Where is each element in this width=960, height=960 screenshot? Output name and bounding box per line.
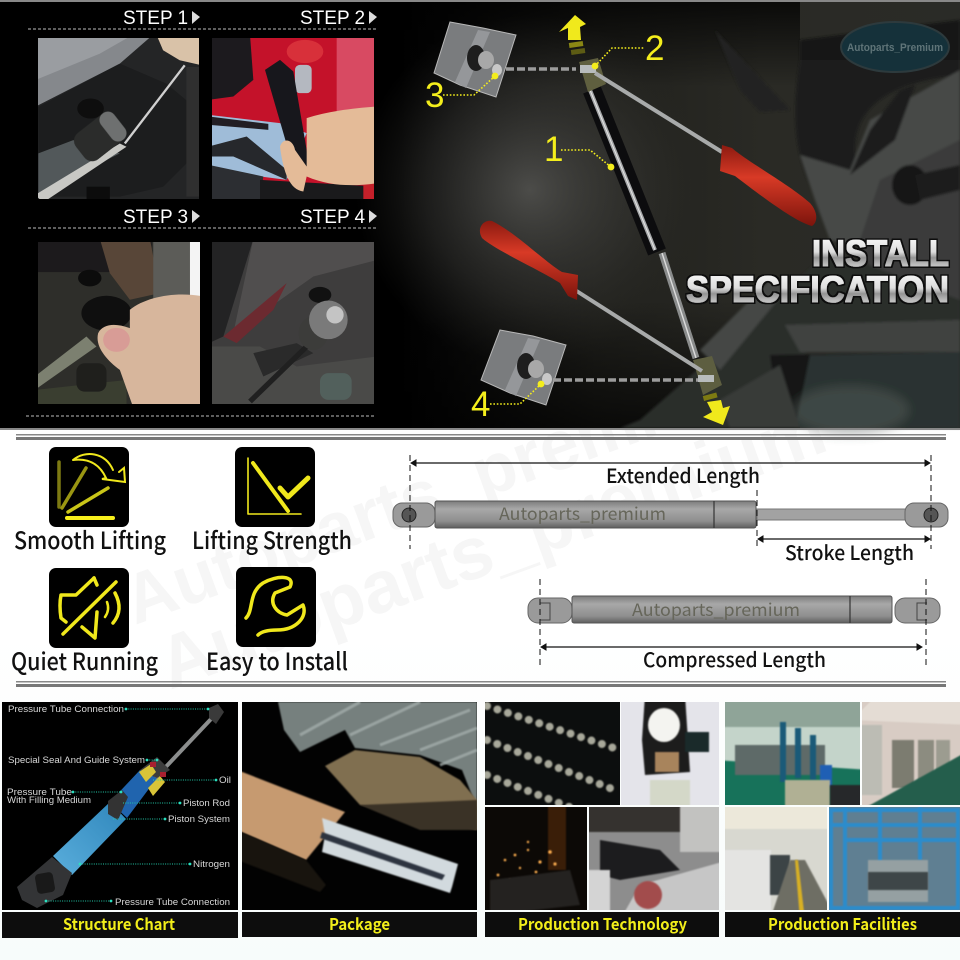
screwdriver upper bbox=[595, 73, 816, 226]
gas strut bbox=[579, 58, 722, 395]
callout 3 bbox=[425, 73, 498, 115]
tile: blue frames bbox=[829, 807, 960, 910]
tile: valve rows bbox=[485, 702, 620, 805]
feature: quiet running: Quiet Running bbox=[11, 642, 158, 677]
feature: quiet running bbox=[11, 568, 158, 677]
dimension: compressed length bbox=[540, 579, 926, 673]
tile: workshop floor bbox=[725, 702, 860, 805]
mount bracket lower bbox=[481, 330, 566, 405]
feature: easy to install: Easy to Install bbox=[206, 642, 348, 677]
caption: production facilities bbox=[725, 911, 960, 937]
caption: structure chart: Structure Chart bbox=[63, 911, 175, 935]
callouts: Oil bbox=[219, 775, 231, 786]
photo: production facilities bbox=[715, 692, 960, 920]
diagram: compressed strut: Autoparts_premium bbox=[632, 596, 800, 621]
tile: robot machine bbox=[589, 807, 719, 910]
feature: lifting strength: Lifting Strength bbox=[192, 521, 352, 556]
icon: lifting arc bbox=[59, 454, 125, 518]
dimension: stroke length bbox=[757, 490, 930, 566]
screwdriver lower bbox=[480, 221, 702, 371]
strut cross-section bbox=[17, 704, 224, 908]
tile: profile projector bbox=[621, 702, 719, 805]
logo badge: Autoparts_Premium bbox=[847, 42, 943, 54]
caption: package bbox=[242, 911, 477, 937]
diagram: extended strut: Autoparts_premium bbox=[499, 500, 666, 525]
dimension: extended length bbox=[410, 455, 931, 549]
diagram: compressed strut bbox=[528, 596, 940, 623]
panel: install hero bbox=[0, 0, 960, 435]
caption: structure chart bbox=[2, 911, 238, 938]
callouts: Piston Rod bbox=[183, 798, 230, 809]
divider bbox=[16, 434, 946, 687]
callout 2: 2 bbox=[645, 29, 664, 68]
step headings bbox=[123, 8, 377, 228]
icon: strut with check bbox=[248, 458, 308, 514]
step headings: STEP 2 bbox=[300, 8, 365, 29]
photo: step 3 bbox=[38, 242, 200, 404]
dimension: compressed length: Compressed Length bbox=[643, 644, 826, 673]
callout 1: 1 bbox=[544, 130, 563, 169]
callouts: With Filling Medium bbox=[7, 795, 91, 806]
callouts: Pressure Tube Connection bbox=[8, 704, 124, 715]
heading: install specification bbox=[686, 233, 949, 310]
logo badge bbox=[841, 22, 949, 72]
caption: production technology: Production Technology bbox=[518, 911, 687, 935]
photo: production technology bbox=[475, 692, 729, 920]
callout 4: 4 bbox=[471, 385, 490, 424]
callouts: Special Seal And Guide System bbox=[8, 755, 145, 766]
step headings: STEP 1 bbox=[123, 8, 188, 29]
step headings: STEP 4 bbox=[300, 207, 366, 228]
arrow: up bbox=[559, 15, 586, 55]
arrow: down bbox=[703, 393, 730, 425]
dashed connector lines bbox=[506, 69, 698, 380]
watermark: Autoparts_premium bbox=[113, 338, 765, 639]
callout 2 bbox=[592, 29, 664, 69]
step headings: STEP 3 bbox=[123, 207, 188, 228]
panel: structure chart bbox=[2, 702, 238, 910]
feature: lifting strength bbox=[192, 447, 352, 556]
callouts: Pressure Tube Connection bbox=[115, 897, 230, 908]
tile: corridor bbox=[725, 807, 827, 910]
hero gradient backdrop bbox=[350, 2, 960, 428]
tile: sparks bbox=[485, 807, 587, 910]
callout 4 bbox=[471, 381, 544, 424]
callouts: Piston System bbox=[168, 814, 230, 825]
caption: production facilities: Production Facilities bbox=[768, 911, 917, 935]
callout 1 bbox=[544, 130, 614, 170]
photo: step 1 bbox=[38, 38, 199, 199]
icon: muted speaker bbox=[60, 578, 119, 638]
mount bracket upper bbox=[434, 22, 516, 97]
caption: package: Package bbox=[329, 911, 390, 935]
feature: easy to install bbox=[206, 567, 348, 677]
icon: wrench bbox=[246, 577, 304, 635]
callouts bbox=[7, 704, 231, 908]
feature: smooth lifting bbox=[14, 447, 166, 556]
diagram: extended strut bbox=[393, 500, 948, 528]
photo: step 2 bbox=[212, 38, 374, 199]
watermark: Autoparts_premium bbox=[147, 387, 836, 705]
callouts: Pressure Tube bbox=[7, 787, 72, 798]
callouts: Nitrogen bbox=[193, 859, 230, 870]
feature: smooth lifting: Smooth Lifting bbox=[14, 521, 166, 556]
photo: step 4 bbox=[212, 242, 374, 404]
photo: package bbox=[242, 702, 477, 910]
dimension: stroke length: Stroke Length bbox=[785, 537, 914, 566]
callout 3: 3 bbox=[425, 76, 444, 115]
tile: cabinets bbox=[862, 702, 960, 805]
dimension: extended length: Extended Length bbox=[606, 460, 760, 489]
hero background art bbox=[620, 20, 960, 435]
